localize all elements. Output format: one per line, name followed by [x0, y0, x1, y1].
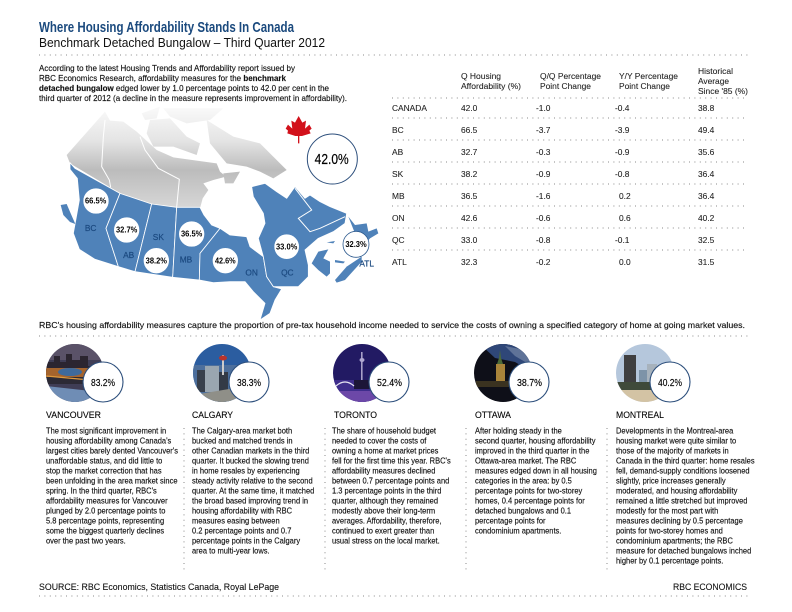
map of Canada [61, 107, 378, 320]
northern territories [67, 107, 287, 208]
province labels: ON [245, 268, 258, 278]
body text: housing market were quite similar to [616, 436, 737, 446]
body text: continued to exert greater than [332, 526, 434, 536]
body text: been unfolding in the area market since [46, 476, 178, 486]
body text: between 0.7 percentage points and [332, 476, 449, 486]
body text: fell for the first time this year. RBC's [332, 456, 451, 466]
value ring: 38.7% [517, 377, 542, 389]
photo: Montreal skyline [616, 344, 674, 402]
province labels [85, 223, 374, 278]
value ring: 83.2% [91, 377, 115, 389]
province labels: SK [153, 232, 164, 242]
body text: in home resales by experiencing [192, 466, 300, 476]
body text: bucked and matched trends in [192, 436, 293, 446]
row: AB: 32.7 [461, 147, 478, 157]
body text: detached bungalows and 0.1 [475, 506, 572, 516]
body text: points for two-storey homes and [616, 526, 723, 536]
city name: VANCOUVER [46, 410, 101, 421]
table header: Point Change [540, 81, 591, 91]
title: Where Housing Affordability Stands In Canada [39, 19, 294, 36]
row: BC: 66.5 [461, 125, 478, 135]
row: Canada: CANADA [392, 103, 427, 113]
body text: housing affordability among Canada's [46, 436, 171, 446]
row: ATL: ATL [392, 257, 407, 267]
row: SK: -0.9 [536, 169, 551, 179]
row: ATL: -0.2 [536, 257, 551, 267]
body text: quarter. At the same time, it matched [192, 486, 314, 496]
BC value: 66.5% [85, 196, 107, 206]
body text: fell, demand-supply conditions loosened [616, 466, 750, 476]
body text: other Canadian markets in the third [192, 446, 309, 456]
province labels: MB [180, 255, 193, 265]
body text: The share of household budget [332, 426, 437, 436]
row: QC [392, 235, 715, 245]
panel: Calgary [192, 344, 314, 556]
photo: Ottawa Parliament [474, 344, 532, 402]
row: ATL: 0.0 [619, 257, 631, 267]
value ring: 40.2% [658, 377, 682, 389]
table header: Average [698, 76, 729, 86]
panel: Montreal [616, 344, 755, 566]
table header: Point Change [619, 81, 670, 91]
body text [332, 426, 451, 546]
row: AB [392, 147, 715, 157]
province: SK [135, 204, 177, 277]
national value: 42.0% [315, 152, 349, 168]
value ring [229, 362, 269, 402]
city name: CALGARY [192, 410, 234, 421]
row: MB [392, 191, 715, 201]
body text [475, 426, 597, 536]
row: ON: 40.2 [698, 213, 715, 223]
body text: condominium apartments; the RBC [616, 536, 733, 546]
body text: slightly, price increases generally [616, 476, 726, 486]
table header: Q/Q Percentage [540, 71, 601, 81]
value ring: 38.3% [237, 377, 261, 389]
row: Canada: 38.8 [698, 103, 715, 113]
table header: Y/Y Percentage [619, 71, 678, 81]
body text: 0.2 percentage points and 0.7 [192, 526, 292, 536]
QC value: 33.0% [276, 241, 298, 251]
row: SK: 36.4 [698, 169, 715, 179]
table header [461, 66, 748, 96]
row: ON [392, 213, 715, 223]
AB value: 32.7% [116, 225, 138, 235]
body text: measures declining by 0.5 percentage [616, 516, 743, 526]
province labels: QC [281, 268, 294, 278]
MB value [179, 221, 205, 247]
province: QC [252, 183, 347, 287]
row: Canada: -0.4 [615, 103, 630, 113]
province: ON [199, 228, 282, 320]
province labels: ATL [359, 259, 374, 269]
body text: steady activity relative to the second [192, 476, 313, 486]
province labels: BC [85, 223, 96, 233]
table header: Affordability (%) [461, 81, 521, 91]
body text [616, 426, 755, 566]
row: QC: 33.0 [461, 235, 478, 245]
body text: some the biggest quarterly declines [46, 526, 164, 536]
intro text block: third quarter of 2012 (a decline in the measure represents improvement in affordability). [39, 93, 347, 103]
body text: largest cities barely dented Vancouver's [46, 446, 178, 456]
row: Canada: 42.0 [461, 103, 478, 113]
panel: Vancouver [46, 344, 178, 546]
body text [46, 426, 178, 546]
body text: quarter. It bucked the slowing trend [192, 456, 309, 466]
intro text block: detached bungalow edged lower by 1.0 percentage points to 42.0 per cent in the [39, 83, 329, 93]
row: AB: -0.9 [615, 147, 630, 157]
row: MB: 36.4 [698, 191, 715, 201]
body text: percentage points in the Calgary [192, 536, 300, 546]
row: SK [392, 169, 715, 179]
row: ATL: 32.3 [461, 257, 478, 267]
subtitle: Benchmark Detached Bungalow – Third Quarter 2012 [39, 35, 325, 50]
row: ON: ON [392, 213, 405, 223]
body text: The Calgary-area market both [192, 426, 292, 436]
body text: measure for detached bungalows inched [616, 546, 751, 556]
body text: needed to cover the costs of [332, 436, 427, 446]
source line: SOURCE: RBC Economics, Statistics Canada, Royal LePage [39, 582, 279, 593]
body text: remained a little stretched but improved [616, 496, 747, 506]
row: QC: 32.5 [698, 235, 715, 245]
body text: Canada in the third quarter: home resales [616, 456, 755, 466]
body text: condominium apartments. [475, 526, 561, 536]
MB value: 36.5% [181, 229, 203, 239]
value ring [650, 362, 690, 402]
row: BC: 49.4 [698, 125, 715, 135]
value ring [369, 362, 409, 402]
QC value [274, 234, 299, 259]
body text: housing affordability with RBC [192, 506, 292, 516]
body text: stop the market correction that has [46, 466, 162, 476]
body text: second quarter, housing affordability [475, 436, 596, 446]
body text: owning a home at market prices [332, 446, 438, 456]
ON value [212, 248, 238, 274]
photo: Calgary skyline [193, 344, 251, 402]
city name: MONTREAL [616, 410, 664, 421]
SK value [143, 248, 169, 274]
AB value [114, 217, 140, 243]
body text: Developments in the Montreal-area [616, 426, 734, 436]
national value [307, 134, 357, 184]
body text: 1.3 percentage points in the third [332, 486, 441, 496]
panel: Toronto [332, 344, 451, 546]
row: Canada: -1.0 [536, 103, 551, 113]
row: ATL [392, 257, 715, 267]
row: ON: -0.6 [536, 213, 551, 223]
body text: 5.8 percentage points, representing [46, 516, 164, 526]
body text: plunged by 2.0 percentage points to [46, 506, 166, 516]
body text: measures edged down in all housing [475, 466, 597, 476]
panel: Ottawa [474, 344, 597, 536]
ATL value: 32.3% [345, 239, 367, 249]
body text: Ottawa-area market. The RBC [475, 456, 577, 466]
value ring [83, 362, 123, 402]
body text: The most significant improvement in [46, 426, 166, 436]
row: ON: 42.6 [461, 213, 478, 223]
row: ON: 0.6 [619, 213, 631, 223]
value ring: 52.4% [377, 377, 402, 389]
province: MB [173, 207, 220, 280]
body text: After holding steady in the [475, 426, 562, 436]
row: MB: MB [392, 191, 405, 201]
region: Atlantic [312, 217, 378, 283]
city name: TORONTO [334, 410, 377, 421]
row: BC: -3.9 [615, 125, 630, 135]
credit: RBC ECONOMICS [673, 582, 747, 593]
row: AB: AB [392, 147, 404, 157]
table: affordability by region [392, 66, 748, 267]
body text: over the past two years. [46, 536, 126, 546]
definition text: RBC's housing affordability measures capture the proportion of pre-tax household income needed to service the costs of owning a specified category of home at going market values. [39, 320, 745, 330]
body text: improved in the third quarter in the [475, 446, 590, 456]
body text: quarter, although they remained [332, 496, 438, 506]
row: MB: -1.6 [536, 191, 551, 201]
row: BC: BC [392, 125, 404, 135]
body text: usual stress on the local market. [332, 536, 440, 546]
ON value: 42.6% [215, 255, 236, 265]
body text: higher by 0.1 percentage points. [616, 556, 723, 566]
intro text block: According to the latest Housing Trends and Affordability report issued by [39, 63, 296, 73]
body text: measures easing between [192, 516, 280, 526]
row: SK: -0.8 [615, 169, 630, 179]
body text: those of the majority of markets in [616, 446, 729, 456]
body text: modestly above their long-term [332, 506, 435, 516]
row: AB: -0.3 [536, 147, 551, 157]
row: MB: 36.5 [461, 191, 478, 201]
body text: affordability measures declined [332, 466, 435, 476]
province labels: AB [123, 250, 135, 260]
intro text block [39, 63, 347, 103]
body text: the broad based improving trend in [192, 496, 308, 506]
value ring [509, 362, 549, 402]
body text: homes, 0.4 percentage points for [475, 496, 585, 506]
body text: modestly for the most part with [616, 506, 718, 516]
icon: maple leaf [286, 116, 312, 143]
body text: affordability measures for Vancouver [46, 496, 168, 506]
body text: moderated, and housing affordability [616, 486, 737, 496]
city name: OTTAWA [475, 410, 512, 421]
row: SK: 38.2 [461, 169, 478, 179]
body text: spring. In the third quarter, RBC's [46, 486, 157, 496]
row: Canada [392, 103, 715, 113]
body text: categories in the area: by 0.5 [475, 476, 572, 486]
body text: percentage points for [475, 516, 546, 526]
intro text block: RBC Economics Research, affordability measures for the benchmark [39, 73, 286, 83]
table header: Since '85 (%) [698, 86, 748, 96]
row: BC [392, 125, 715, 135]
ATL value [343, 231, 369, 257]
body text: area to multi-year lows. [192, 546, 270, 556]
body text: unaffordable status, and did little to [46, 456, 163, 466]
table header: Historical [698, 66, 733, 76]
body text: averages. Affordability, therefore, [332, 516, 442, 526]
table header: Q Housing [461, 71, 501, 81]
province: AB [106, 193, 152, 272]
row: QC: -0.1 [615, 235, 630, 245]
row: QC: -0.8 [536, 235, 551, 245]
photo: Vancouver skyline [46, 344, 104, 402]
body text [192, 426, 314, 556]
row: QC: QC [392, 235, 405, 245]
province: BC [70, 163, 120, 267]
photo: Toronto skyline [333, 344, 391, 402]
body text: percentage points for two-storey [475, 486, 582, 496]
row: ATL: 31.5 [698, 257, 715, 267]
row: BC: -3.7 [536, 125, 551, 135]
row: MB: 0.2 [619, 191, 631, 201]
row: AB: 35.6 [698, 147, 715, 157]
BC value [83, 188, 109, 214]
row: SK: SK [392, 169, 404, 179]
SK value: 38.2% [146, 255, 168, 265]
